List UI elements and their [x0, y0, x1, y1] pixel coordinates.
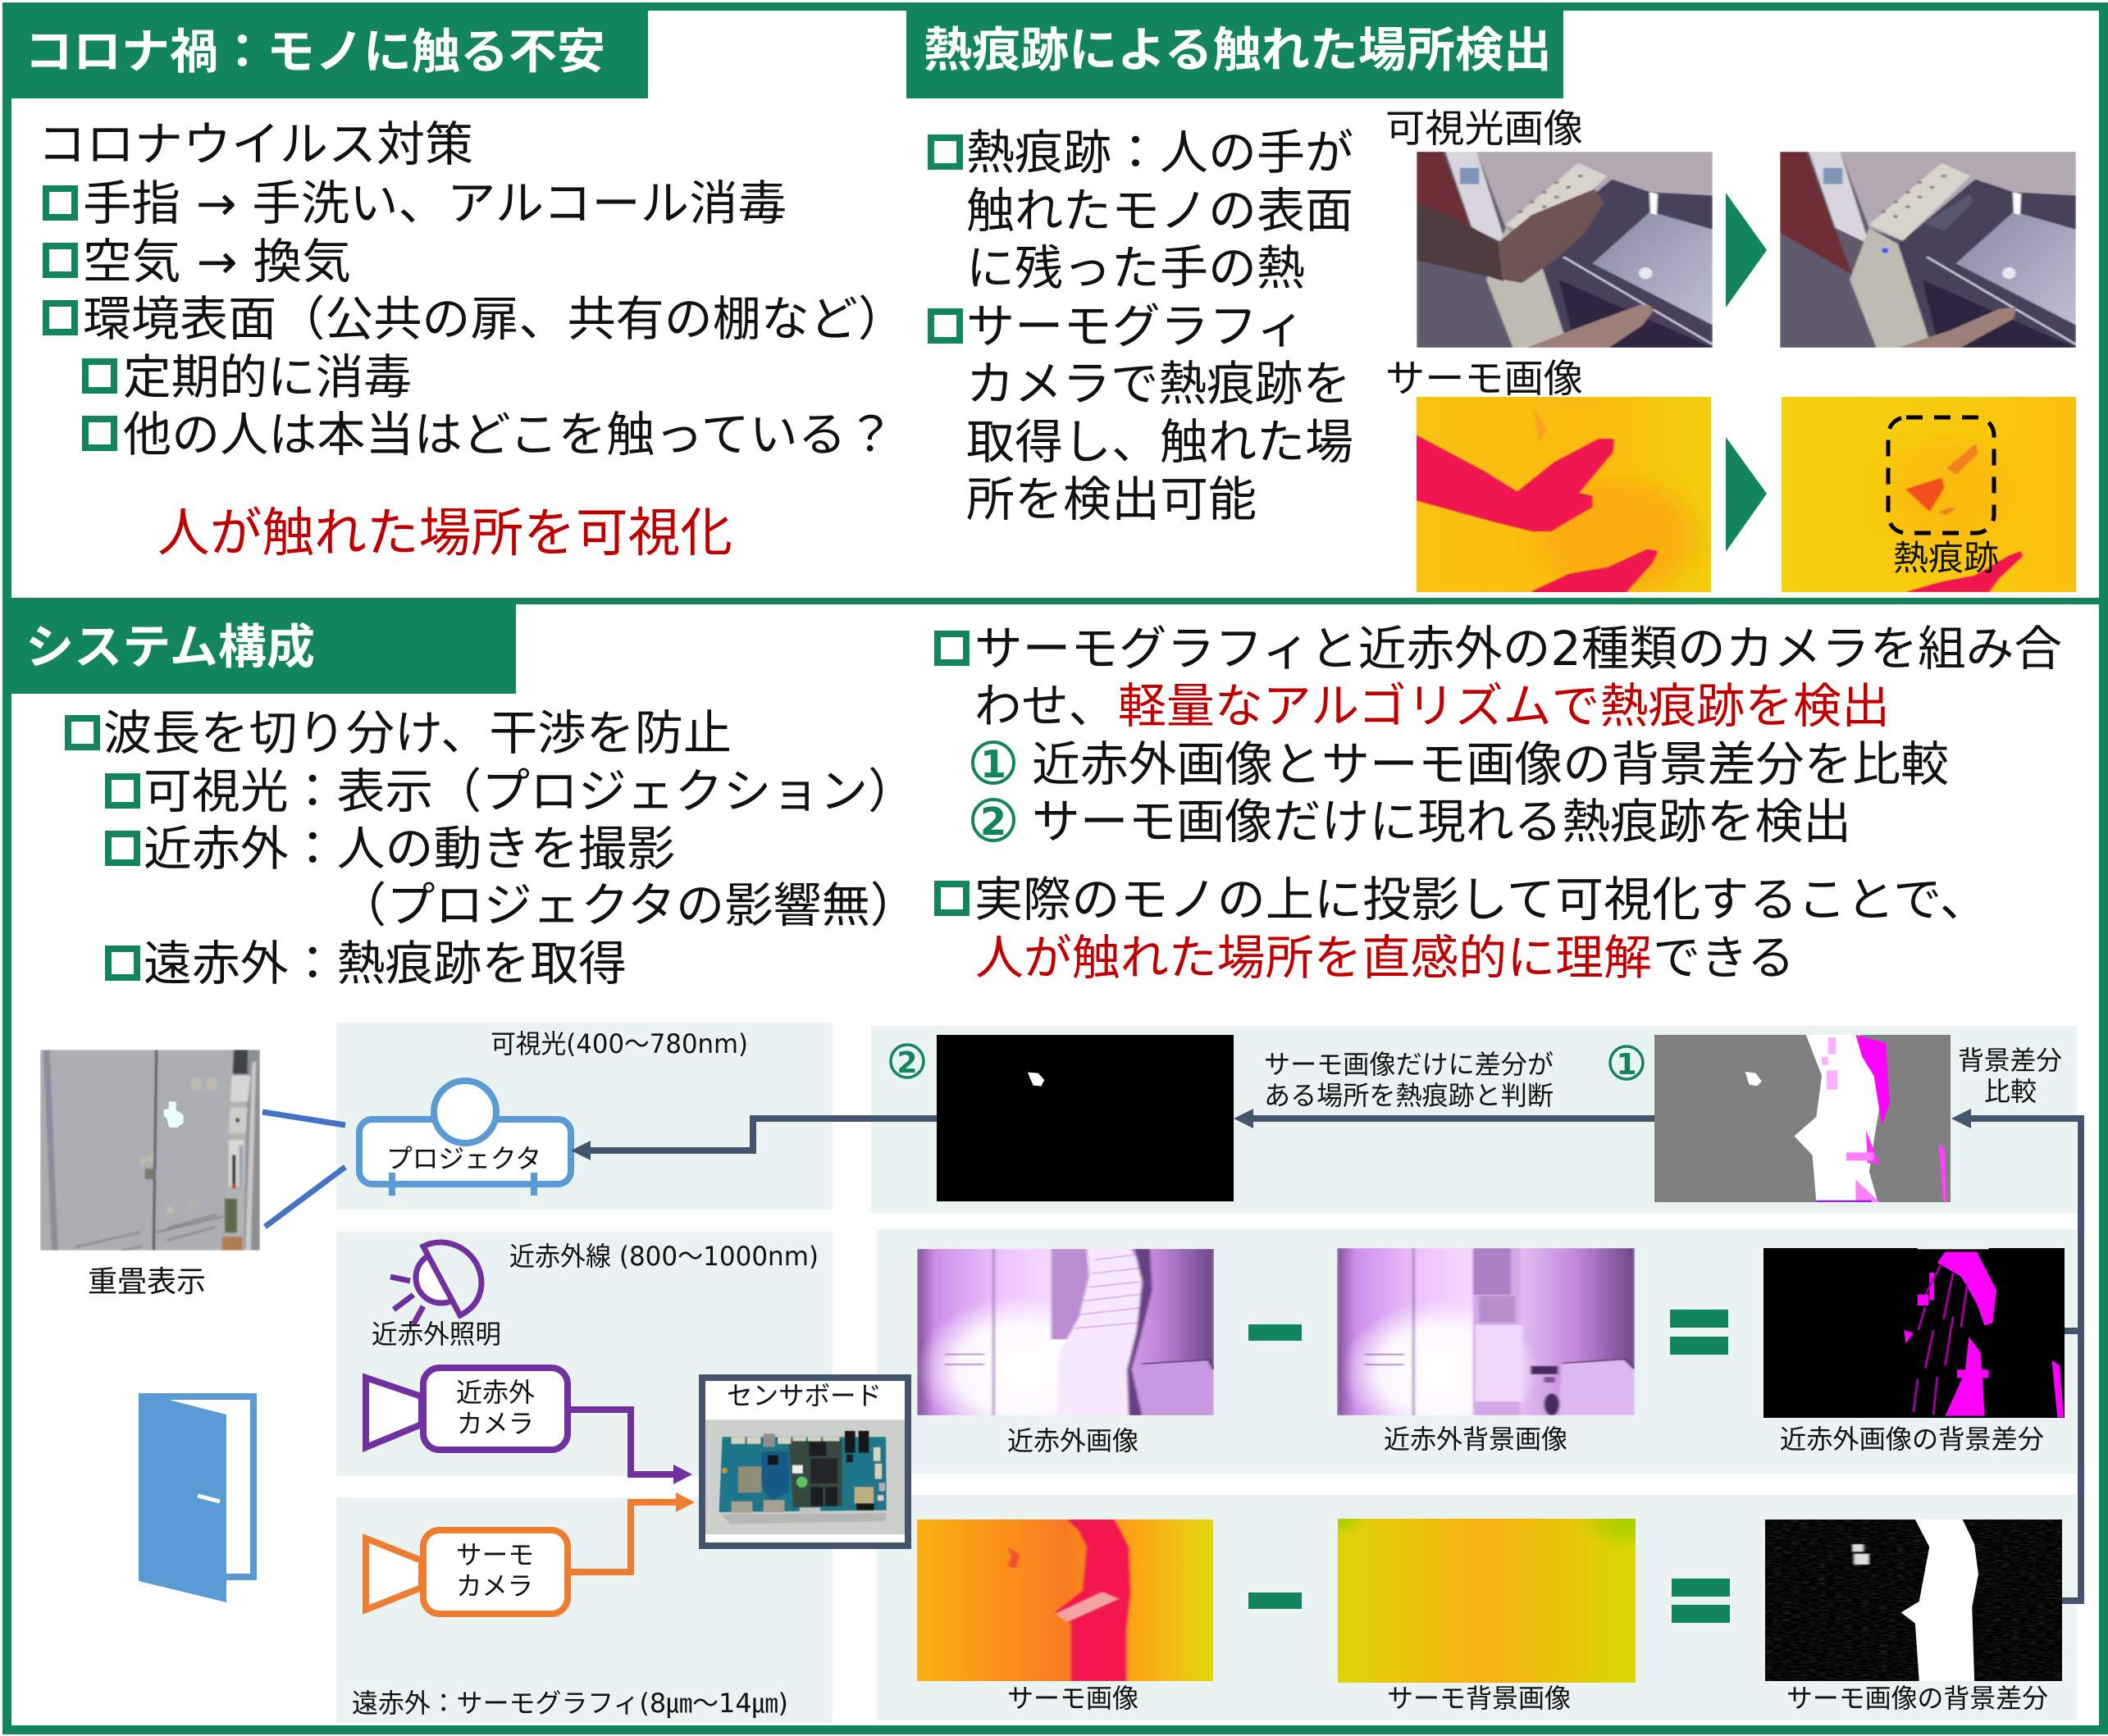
photo: hand touching machine: [1417, 152, 1713, 348]
icon: projector: [359, 1081, 571, 1196]
image: thermal: [917, 1520, 1213, 1681]
icon: thermal camera: カメラ: [456, 1570, 533, 1602]
image: thermal background: [1338, 1519, 1636, 1683]
arrow: bottom triangle: [1726, 437, 1767, 552]
text block: algorithm summary: サーモ画像だけに現れる熱痕跡を検出: [1032, 794, 1851, 850]
arrow: top triangle: [1726, 193, 1767, 308]
arrow: detection result to projector: [571, 1119, 937, 1160]
label: visible image: 可視光画像: [1385, 107, 1583, 152]
text block: wavelength separation: 可視光：表示（プロジェクション）: [144, 763, 916, 819]
label: visible wavelength: 可視光(400〜780nm): [490, 1028, 748, 1059]
text block: algorithm summary: わせ、: [974, 678, 1116, 734]
arrow: thermal camera to board: [569, 1492, 695, 1572]
photo: overlay on cabinet: [40, 1050, 260, 1251]
callout: visualize touched places: 人が触れた場所を可視化: [157, 503, 732, 564]
text block: algorithm summary: サーモグラフィと近赤外の2種類のカメラを組み合: [974, 621, 2062, 677]
dashed highlight around heat trace: [1888, 417, 1994, 533]
icon: near infrared camera: 近赤外: [456, 1377, 535, 1408]
number 2: 2: [897, 1046, 918, 1080]
text block: heat trace explanation: カメラで熱痕跡を: [966, 356, 1351, 412]
arrow: near infrared camera to board: [569, 1410, 692, 1484]
photo: circuit board: [705, 1419, 905, 1534]
horizontal section divider: [2, 598, 2108, 604]
label: heat trace decision: [1264, 1049, 1554, 1111]
panel: system configuration: [2, 604, 2062, 991]
labels: near infrared row: [1007, 1424, 2044, 1456]
text block: heat trace explanation: 触れたモノの表面: [966, 183, 1353, 239]
text block: heat trace explanation: 所を検出可能: [966, 472, 1257, 527]
image: comparison of differences: [1654, 1035, 1951, 1202]
label: thermal image: サーモ画像: [1385, 357, 1583, 402]
text block: algorithm summary: 人が触れた場所を直感的に理解: [975, 930, 1652, 986]
icon: projector: プロジェクタ: [386, 1143, 541, 1174]
image: near infrared difference: [1764, 1248, 2065, 1418]
heading: system configuration: システム構成: [25, 619, 315, 675]
text block: countermeasures: コロナウイルス対策: [38, 116, 473, 172]
text block: algorithm summary: 1: [980, 742, 1006, 786]
icon: near infrared lamp: [390, 1242, 481, 1324]
label: overlay display: 重畳表示: [88, 1265, 206, 1299]
text block: countermeasures: 手指 → 手洗い、アルコール消毒: [83, 175, 787, 231]
arrow: difference to heat trace: [1234, 1109, 1654, 1128]
label: near infrared wavelength: 近赤外線 (800〜1000nm): [509, 1241, 819, 1272]
text block: wavelength separation: 近赤外：人の動きを撮影: [144, 821, 675, 877]
thermal photo: heat trace: [1782, 397, 2076, 592]
image: detected heat trace mask: [937, 1035, 1234, 1201]
image: thermal difference: [1765, 1520, 2062, 1681]
vertical return line of thermal and NIR difference: [1951, 1109, 2081, 1601]
text block: heat trace explanation: 熱痕跡：人の手が: [966, 125, 1353, 180]
icon: thermal camera: [366, 1530, 568, 1614]
projection lines: [262, 1112, 345, 1227]
text block: wavelength separation: （プロジェクタの影響無）: [338, 877, 919, 933]
text block: algorithm summary: 近赤外画像とサーモ画像の背景差分を比較: [1032, 736, 1949, 792]
labels: near infrared row: 近赤外背景画像: [1384, 1424, 1567, 1455]
text block: countermeasures: 他の人は本当はどこを触っている？: [123, 407, 895, 462]
labels: thermal row: [1007, 1683, 2048, 1714]
panel: heat trace detection: [906, 11, 2076, 592]
image: near infrared background: [1337, 1248, 1635, 1415]
panel: corona anxiety: [2, 11, 906, 564]
text block: countermeasures: 定期的に消毒: [123, 349, 412, 405]
text block: algorithm summary: 軽量なアルゴリズムで熱痕跡を検出: [1118, 678, 1890, 734]
labels: thermal row: サーモ背景画像: [1387, 1683, 1571, 1714]
icon: near infrared camera: カメラ: [457, 1408, 534, 1439]
text block: wavelength separation: 遠赤外：熱痕跡を取得: [144, 936, 627, 991]
text block: heat trace explanation: 取得し、触れた場: [966, 414, 1353, 470]
sensor board: [702, 1378, 908, 1546]
text block: heat trace explanation: に残った手の熱: [966, 240, 1305, 296]
text block: heat trace explanation: [931, 125, 1353, 527]
sensor board: センサボード: [727, 1380, 882, 1411]
text block: algorithm summary: 2: [980, 800, 1006, 844]
text block: algorithm summary: 実際のモノの上に投影して可視化することで、: [974, 872, 1988, 927]
labels: near infrared row: 近赤外画像: [1007, 1425, 1138, 1456]
labels: thermal row: サーモ画像: [1007, 1683, 1138, 1714]
equals sign: [1672, 1579, 1730, 1623]
thermal photo: hand touching: [1417, 397, 1711, 592]
heading: heat trace detection: 熱痕跡による触れた場所検出: [924, 22, 1552, 78]
equals sign: [1670, 1310, 1728, 1355]
number 1: [1610, 1046, 1643, 1082]
text block: wavelength separation: 波長を切り分け、干渉を防止: [103, 705, 732, 761]
label: difference comparison: 背景差分: [1958, 1045, 2062, 1076]
labels: near infrared row: 近赤外画像の背景差分: [1780, 1424, 2044, 1455]
label: heat trace decision: サーモ画像だけに差分が: [1264, 1049, 1554, 1080]
minus sign: [1248, 1324, 1302, 1341]
label: difference comparison: 比較: [1984, 1076, 2037, 1107]
label: heat trace: 熱痕跡: [1893, 538, 1999, 578]
heading: corona anxiety: コロナ禍：モノに触る不安: [25, 24, 605, 80]
label: near infrared light: 近赤外照明: [372, 1319, 501, 1350]
photo: machine after hand removed: [1780, 152, 2076, 348]
text block: countermeasures: [38, 116, 906, 462]
image: near infrared: [917, 1249, 1214, 1415]
minus sign: [1248, 1592, 1302, 1609]
labels: thermal row: サーモ画像の背景差分: [1786, 1683, 2048, 1714]
label: difference comparison: [1958, 1045, 2062, 1107]
text block: countermeasures: 環境表面（公共の扉、共有の棚など）: [83, 291, 906, 347]
text block: heat trace explanation: サーモグラフィ: [966, 298, 1305, 354]
text block: countermeasures: 空気 → 換気: [83, 234, 351, 289]
label: heat trace decision: ある場所を熱痕跡と判断: [1264, 1080, 1554, 1111]
number 2: [891, 1045, 924, 1080]
number 1: 1: [1616, 1048, 1637, 1082]
text block: wavelength separation: [68, 705, 919, 991]
icon: near infrared camera: [366, 1368, 568, 1450]
heading: corona anxiety: [2, 11, 648, 98]
icon: thermal camera: サーモ: [456, 1539, 534, 1570]
label: far infrared wavelength: 遠赤外：サーモグラフィ(8㎛〜14㎛): [352, 1688, 788, 1719]
heading: heat trace detection: [906, 11, 1563, 98]
text block: algorithm summary: [938, 621, 2062, 986]
icon: door: [139, 1393, 253, 1602]
text block: algorithm summary: できる: [1653, 930, 1795, 986]
heading: system configuration: [2, 604, 516, 694]
background panels: [336, 1023, 2077, 1723]
